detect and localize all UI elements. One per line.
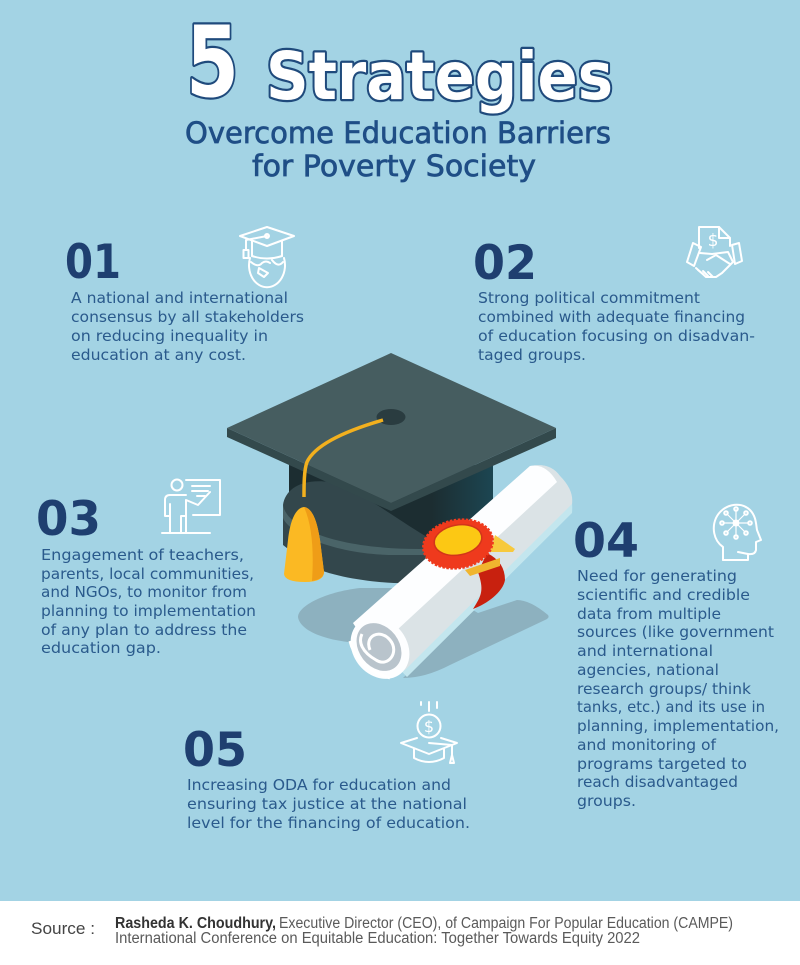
- text block 04: Need for generating: [577, 567, 737, 585]
- text block 02: taged groups.: [478, 346, 586, 364]
- text block 04: reach disadvantaged: [577, 773, 738, 791]
- icon: handshake and document: [687, 227, 742, 277]
- text block 04: data from multiple: [577, 605, 721, 623]
- text block 02: Strong political commitment: [478, 289, 700, 307]
- text block 05: level for the financing of education.: [187, 814, 470, 832]
- icon: coin over graduation cap: [401, 702, 457, 763]
- text block 02: of education focusing on disadvan-: [478, 327, 755, 345]
- subtitle: for Poverty Society: [252, 149, 536, 183]
- text block 04: tanks, etc.) and its use in: [577, 698, 765, 716]
- panel: strategy 01: [65, 227, 304, 364]
- source label: Source :: [31, 919, 95, 938]
- subtitle: [185, 116, 611, 183]
- diploma: [338, 465, 572, 691]
- subtitle: Overcome Education Barriers: [185, 116, 611, 150]
- tassel: [284, 420, 383, 582]
- icon: coin over graduation cap: $: [424, 717, 434, 736]
- source text: [115, 915, 733, 947]
- text block 04: planning, implementation,: [577, 717, 779, 735]
- title: 5: [186, 6, 239, 120]
- number 03: 03: [36, 492, 101, 547]
- text block 04: [577, 567, 779, 810]
- cap body: [283, 465, 493, 583]
- text block 04: scientific and credible: [577, 586, 750, 604]
- shadow: [298, 588, 400, 643]
- text block 04: groups.: [577, 792, 636, 810]
- number 02: 02: [473, 236, 537, 291]
- text block 05: [187, 776, 470, 832]
- source text: International Conference on Equitable Education: Together Towards Equity 2022: [115, 930, 640, 947]
- panel: strategy 05: [183, 702, 470, 832]
- text block 03: [41, 546, 256, 657]
- text block 03: education gap.: [41, 639, 161, 657]
- source text: Rasheda K. Choudhury,: [115, 915, 276, 932]
- text block 03: of any plan to address the: [41, 621, 247, 639]
- panel: strategy 02: [473, 227, 755, 364]
- text block 01: on reducing inequality in: [71, 327, 268, 345]
- icon: graduation cap with globe: [240, 227, 294, 287]
- mortarboard: [227, 353, 556, 511]
- text block 04: agencies, national: [577, 661, 719, 679]
- title: [186, 6, 613, 120]
- number 04: 04: [573, 514, 639, 569]
- text block 03: and NGOs, to monitor from: [41, 583, 247, 601]
- number 01: 01: [65, 235, 121, 290]
- text block 02: [478, 289, 755, 364]
- text block 04: programs targeted to: [577, 755, 747, 773]
- title: Strategies: [266, 38, 613, 115]
- illustration: graduation cap and diploma: [227, 353, 572, 691]
- ribbon seal: [419, 514, 515, 609]
- source text: Executive Director (CEO), of Campaign For Popular Education (CAMPE): [279, 915, 733, 932]
- text block 04: and monitoring of: [577, 736, 717, 754]
- text block 04: research groups/ think: [577, 680, 751, 698]
- icon: handshake and document: $: [708, 231, 718, 251]
- text block 04: sources (like government: [577, 623, 774, 641]
- text block 01: education at any cost.: [71, 346, 246, 364]
- icon: head with network: [714, 505, 761, 560]
- number 05: 05: [183, 723, 247, 778]
- text block 03: parents, local communities,: [41, 565, 254, 583]
- text block 05: ensuring tax justice at the national: [187, 795, 467, 813]
- text block 01: consensus by all stakeholders: [71, 308, 304, 326]
- text block 03: planning to implementation: [41, 602, 256, 620]
- text block 02: combined with adequate financing: [478, 308, 745, 326]
- text block 01: A national and international: [71, 289, 288, 307]
- panel: strategy 03: [36, 480, 256, 657]
- text block 04: and international: [577, 642, 713, 660]
- panel: strategy 04: [573, 505, 779, 810]
- text block 01: [71, 289, 304, 364]
- icon: teacher at board: [162, 480, 220, 533]
- footer panel: [0, 901, 800, 965]
- text block 03: Engagement of teachers,: [41, 546, 244, 564]
- text block 05: Increasing ODA for education and: [187, 776, 451, 794]
